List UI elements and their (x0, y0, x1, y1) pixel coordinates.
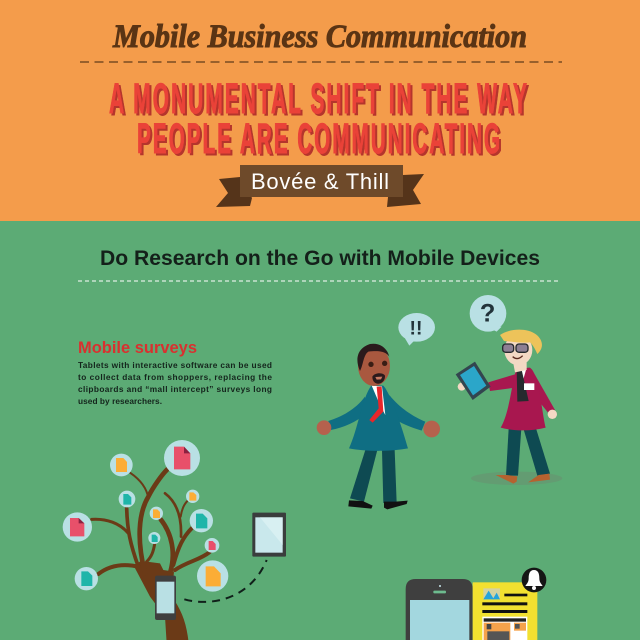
ribbon banner: Bovée & Thill (251, 169, 389, 194)
icon: bell (522, 568, 546, 592)
tablet (252, 513, 286, 557)
man in maroon blazer with tablet (456, 330, 557, 484)
phone on trunk (155, 576, 176, 620)
headline (109, 75, 531, 165)
speech bubble: question (470, 295, 506, 332)
title: Mobile Business Communication (112, 19, 527, 55)
panel: green research section (0, 221, 640, 640)
dashed connector (184, 560, 267, 602)
illustration: phone and document with alert (406, 568, 546, 640)
tree branches and trunk (92, 469, 209, 640)
yellow document (473, 582, 537, 640)
text block: mobile surveys: Mobile surveys (78, 339, 197, 357)
text block: mobile surveys: to collect data from shoppers, replacing the (78, 372, 272, 382)
ribbon banner (216, 165, 424, 207)
man in teal suit (317, 344, 440, 509)
speech bubble: exclamation (398, 313, 435, 346)
text block: mobile surveys: clipboards and “mall intercept” surveys long (78, 384, 272, 394)
ground shadow (471, 472, 562, 485)
speech bubble: question: ? (480, 300, 495, 328)
section heading: Do Research on the Go with Mobile Devices (100, 247, 540, 270)
illustration: document tree (63, 440, 286, 640)
text block: mobile surveys: Tablets with interactive software can be used (78, 360, 272, 370)
illustration: two people talking (317, 295, 562, 509)
speech bubble: exclamation: !! (410, 319, 422, 340)
document bubbles (63, 440, 228, 592)
text block: mobile surveys: used by researchers. (78, 396, 162, 406)
smartphone (406, 579, 473, 640)
text block: mobile surveys (78, 339, 272, 406)
panel: orange header (0, 0, 640, 221)
